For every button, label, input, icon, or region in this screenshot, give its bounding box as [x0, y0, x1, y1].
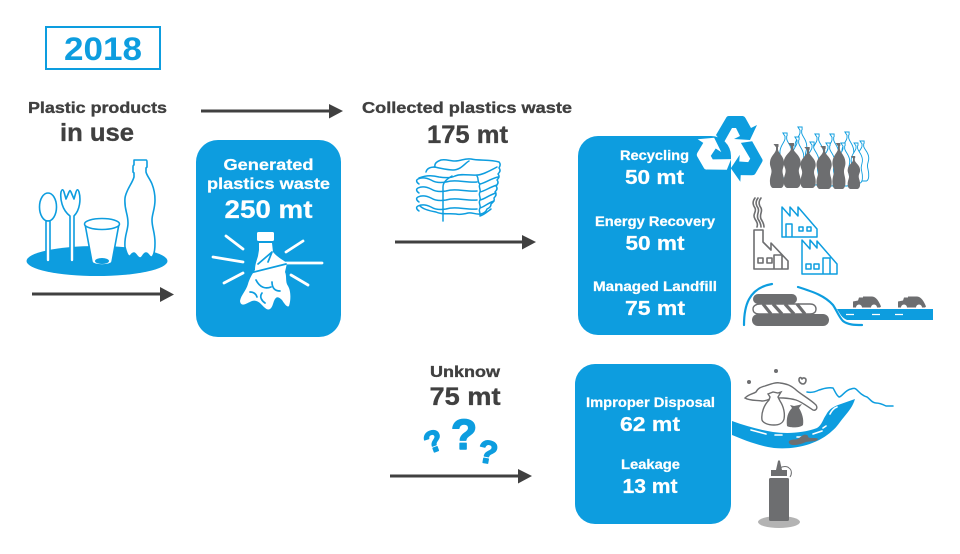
panel: managed waste: 75 mt	[625, 298, 685, 320]
icon: waste dump by a river	[732, 369, 893, 448]
icon: question marks: ?	[419, 423, 448, 461]
panel: managed waste: Energy Recovery	[595, 214, 716, 229]
year label: 2018: 2018	[64, 31, 142, 67]
panel: generated plastics waste: 250 mt	[224, 196, 313, 224]
icon: question marks: ?	[475, 433, 501, 472]
panel: unmanaged waste: Leakage	[621, 457, 681, 472]
panel: managed waste	[578, 136, 731, 335]
icon: stacked bales of plastic waste	[417, 159, 500, 221]
icon: plastic bottles	[770, 127, 869, 189]
icon: question marks	[419, 411, 501, 472]
panel: managed waste: 50 mt	[626, 233, 685, 255]
heading: collected plastics waste: 175 mt	[427, 121, 509, 149]
icon: recycling symbol	[690, 116, 769, 186]
heading: unknown: 75 mt	[430, 383, 501, 411]
heading: plastic products in use	[28, 100, 167, 147]
panel: managed waste: Managed Landfill	[593, 279, 717, 294]
heading: unknown	[430, 364, 501, 411]
arrow: collected to managed	[395, 235, 536, 250]
panel: unmanaged waste: 13 mt	[622, 476, 678, 498]
heading: plastic products in use: Plastic products	[28, 100, 167, 117]
arrow: in use to generated	[32, 287, 174, 302]
panel: unmanaged waste: Improper Disposal	[586, 395, 715, 410]
arrow: unknown to improper	[390, 469, 532, 484]
panel: managed waste: Recycling	[620, 148, 689, 163]
year label: 2018	[46, 27, 160, 69]
panel: generated plastics waste: Generated	[224, 157, 314, 174]
icon: landfill and trucks	[744, 284, 933, 326]
heading: collected plastics waste	[362, 100, 572, 149]
panel: unmanaged waste	[575, 364, 731, 524]
panel: managed waste: 50 mt	[625, 167, 684, 189]
panel: generated plastics waste: plastics waste	[207, 176, 330, 193]
icon: question marks: ?	[451, 411, 477, 459]
panel: generated plastics waste	[196, 140, 341, 337]
icon: factories	[753, 198, 837, 274]
icon: leaking bottle	[758, 460, 800, 528]
heading: unknown: Unknow	[430, 364, 501, 381]
arrow: to collected	[201, 104, 343, 118]
heading: plastic products in use: in use	[60, 119, 134, 147]
icon: plastic products on a tray	[26, 160, 168, 276]
icon: crushed bottle	[213, 232, 322, 310]
panel: unmanaged waste: 62 mt	[620, 414, 680, 436]
heading: collected plastics waste: Collected plastics waste	[362, 100, 572, 117]
